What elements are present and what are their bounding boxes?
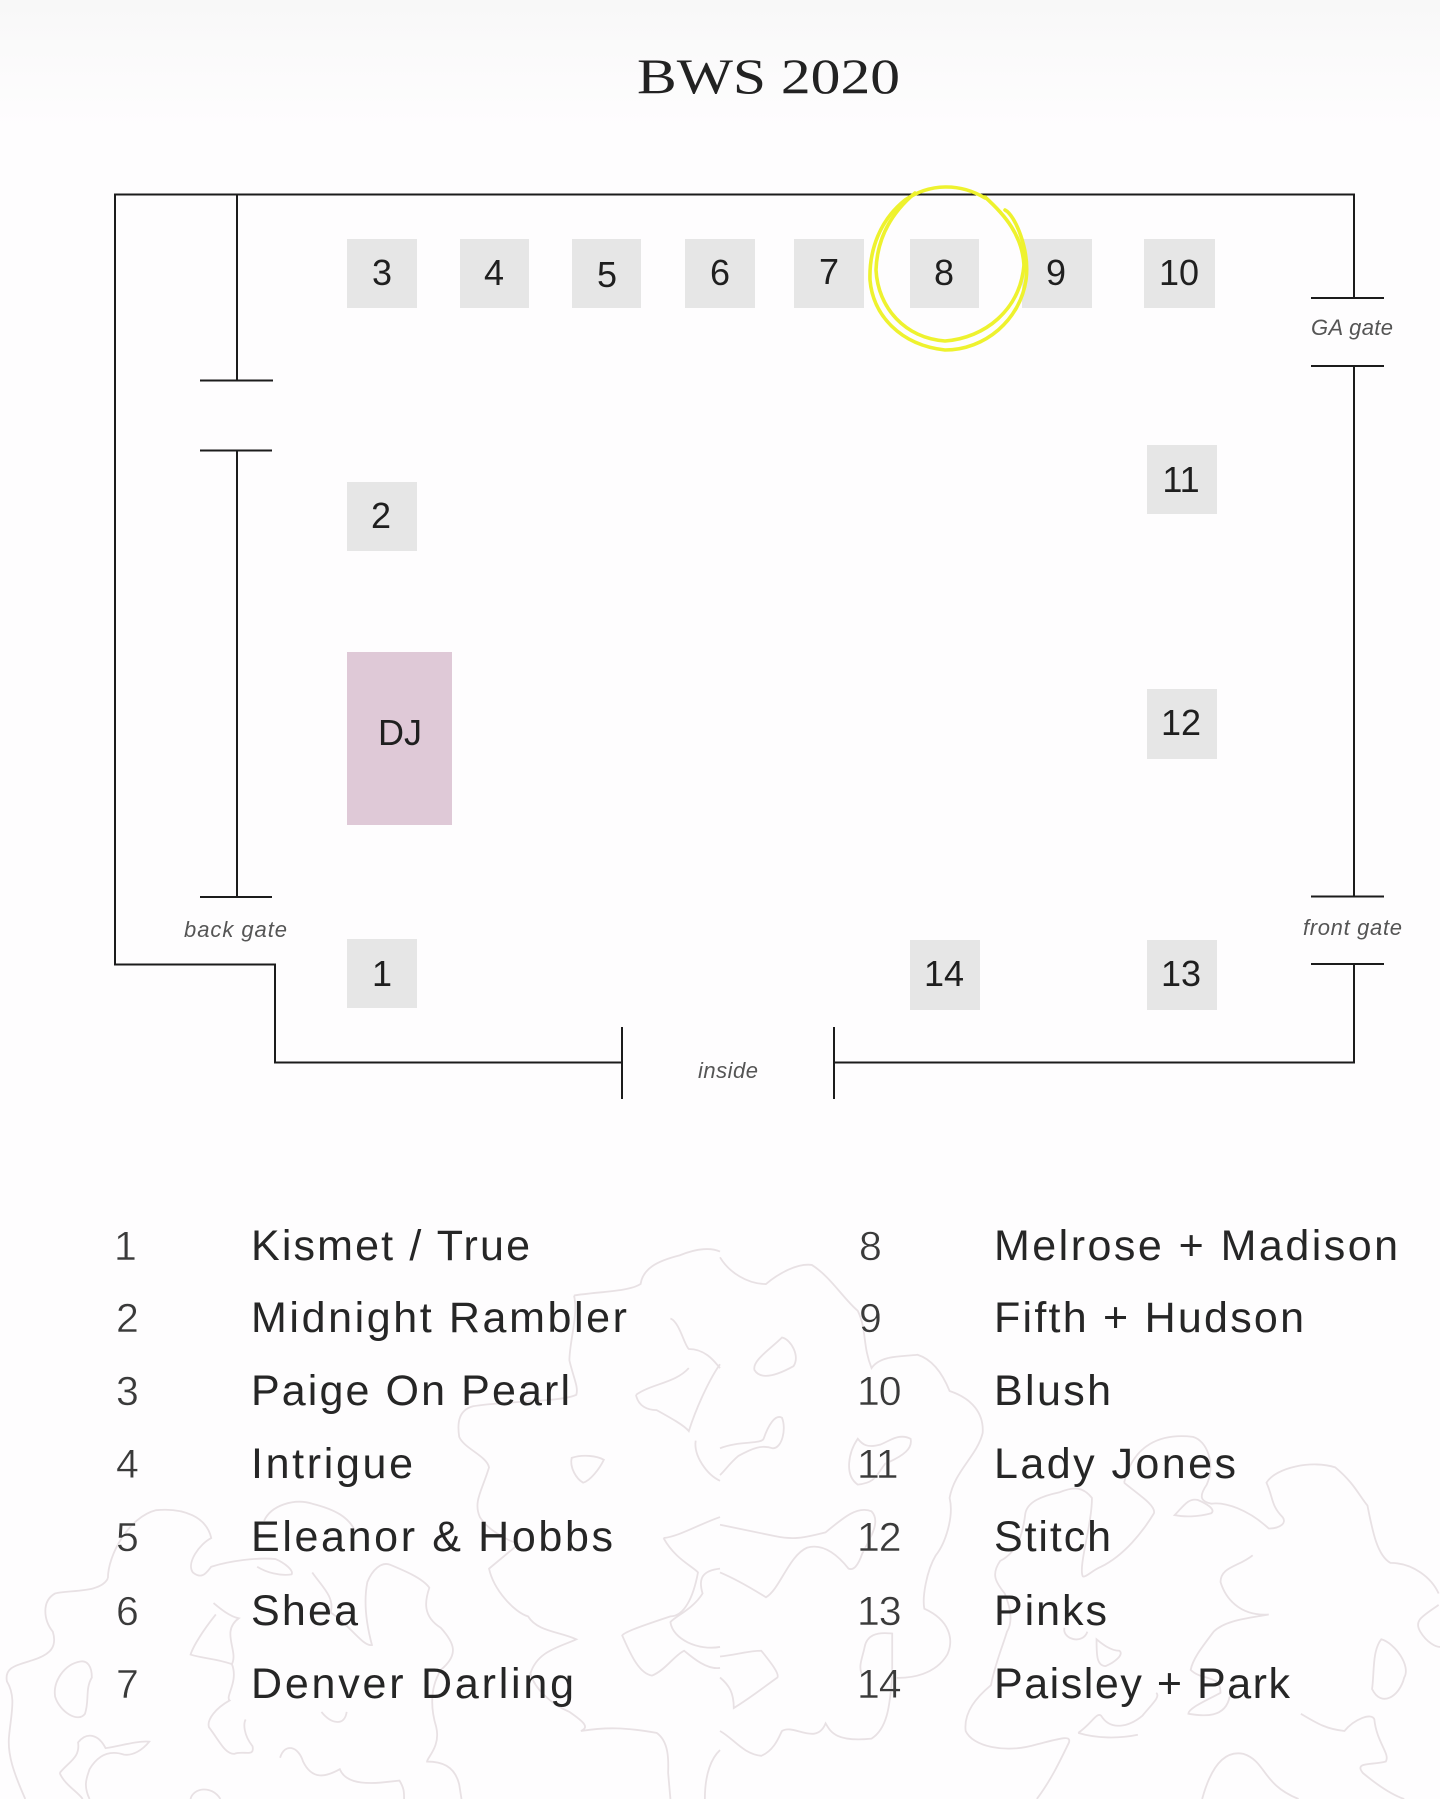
row 10 bbox=[857, 1367, 1111, 1415]
row 14: 14 bbox=[857, 1661, 901, 1707]
row 4: 4 bbox=[116, 1441, 138, 1487]
row 7: 7 bbox=[116, 1661, 138, 1707]
booth 9: 9 bbox=[1046, 252, 1066, 293]
booth 10 bbox=[1144, 239, 1215, 308]
row 14 bbox=[857, 1660, 1290, 1708]
row 8: Melrose + Madison bbox=[994, 1222, 1398, 1270]
booth 2 bbox=[347, 482, 417, 551]
label: front gate: front gate bbox=[1303, 915, 1402, 940]
row 13: 13 bbox=[857, 1588, 901, 1634]
row 1: Kismet / True bbox=[251, 1222, 530, 1270]
booth 11 bbox=[1147, 445, 1217, 514]
DJ booth: DJ bbox=[378, 712, 422, 753]
row 1: 1 bbox=[114, 1223, 136, 1269]
legend: booths 1 to 7 bbox=[114, 1222, 627, 1708]
background contour map: left bbox=[7, 1249, 720, 1799]
row 2: Midnight Rambler bbox=[251, 1294, 627, 1342]
label: inside: inside bbox=[698, 1058, 758, 1083]
row 3: Paige On Pearl bbox=[251, 1367, 570, 1415]
row 11: 11 bbox=[857, 1441, 898, 1487]
venue walls bbox=[115, 194, 1354, 1099]
legend: booths 8 to 14 bbox=[857, 1222, 1398, 1708]
booth 11: 11 bbox=[1162, 459, 1200, 500]
row 13 bbox=[857, 1587, 1107, 1635]
row 4 bbox=[116, 1440, 413, 1488]
row 6: Shea bbox=[251, 1587, 358, 1635]
booth 5: 5 bbox=[597, 254, 617, 295]
label: back gate: back gate bbox=[184, 917, 287, 942]
row 9: Fifth + Hudson bbox=[994, 1294, 1304, 1342]
front gate barrier bbox=[1311, 896, 1384, 964]
booth 14: 14 bbox=[924, 953, 964, 994]
booth 6 bbox=[685, 239, 755, 308]
row 12 bbox=[857, 1513, 1111, 1561]
row 13: Pinks bbox=[994, 1587, 1107, 1635]
booth 13: 13 bbox=[1161, 953, 1201, 994]
booth 1 bbox=[347, 939, 417, 1008]
booth 7 bbox=[794, 239, 864, 308]
booth 2: 2 bbox=[371, 495, 391, 536]
row 3: 3 bbox=[116, 1368, 138, 1414]
row 8: 8 bbox=[859, 1223, 881, 1269]
row 6 bbox=[116, 1587, 358, 1635]
row 5: 5 bbox=[116, 1514, 138, 1560]
booth 8: 8 bbox=[934, 252, 954, 293]
booth 4: 4 bbox=[484, 252, 504, 293]
booth 6: 6 bbox=[710, 252, 730, 293]
booth 3: 3 bbox=[372, 252, 392, 293]
row 12: 12 bbox=[857, 1514, 901, 1560]
booth 10: 10 bbox=[1159, 252, 1199, 293]
row 1 bbox=[114, 1222, 530, 1270]
DJ booth bbox=[347, 652, 452, 825]
row 12: Stitch bbox=[994, 1513, 1111, 1561]
row 11: Lady Jones bbox=[994, 1440, 1236, 1488]
label: GA gate: GA gate bbox=[1311, 315, 1393, 340]
row 11 bbox=[857, 1440, 1236, 1488]
row 10: Blush bbox=[994, 1367, 1111, 1415]
back gate barrier bbox=[200, 380, 273, 897]
row 4: Intrigue bbox=[251, 1440, 413, 1488]
booth 14 bbox=[910, 940, 980, 1010]
booth 1: 1 bbox=[372, 953, 392, 994]
booth 12 bbox=[1147, 689, 1217, 759]
booth 12: 12 bbox=[1161, 702, 1201, 743]
highlight circle around booth 8 bbox=[870, 187, 1027, 350]
floor plan bbox=[115, 194, 1402, 1099]
row 14: Paisley + Park bbox=[994, 1660, 1290, 1708]
row 7: Denver Darling bbox=[251, 1660, 574, 1708]
row 10: 10 bbox=[857, 1368, 901, 1414]
booth 7: 7 bbox=[819, 251, 839, 292]
booth 5 bbox=[572, 239, 641, 308]
row 5: Eleanor & Hobbs bbox=[251, 1513, 613, 1561]
background contour map: right bbox=[720, 1257, 1440, 1799]
booth 9 bbox=[1022, 239, 1092, 308]
row 2: 2 bbox=[116, 1295, 138, 1341]
booth 4 bbox=[460, 239, 529, 308]
row 9: 9 bbox=[859, 1295, 881, 1341]
booth 8 bbox=[910, 239, 979, 308]
booth 13 bbox=[1147, 940, 1217, 1010]
row 6: 6 bbox=[116, 1588, 138, 1634]
GA gate barrier bbox=[1311, 298, 1384, 366]
booth 3 bbox=[347, 239, 417, 308]
row 9 bbox=[859, 1294, 1304, 1342]
title: BWS 2020 bbox=[637, 48, 900, 104]
